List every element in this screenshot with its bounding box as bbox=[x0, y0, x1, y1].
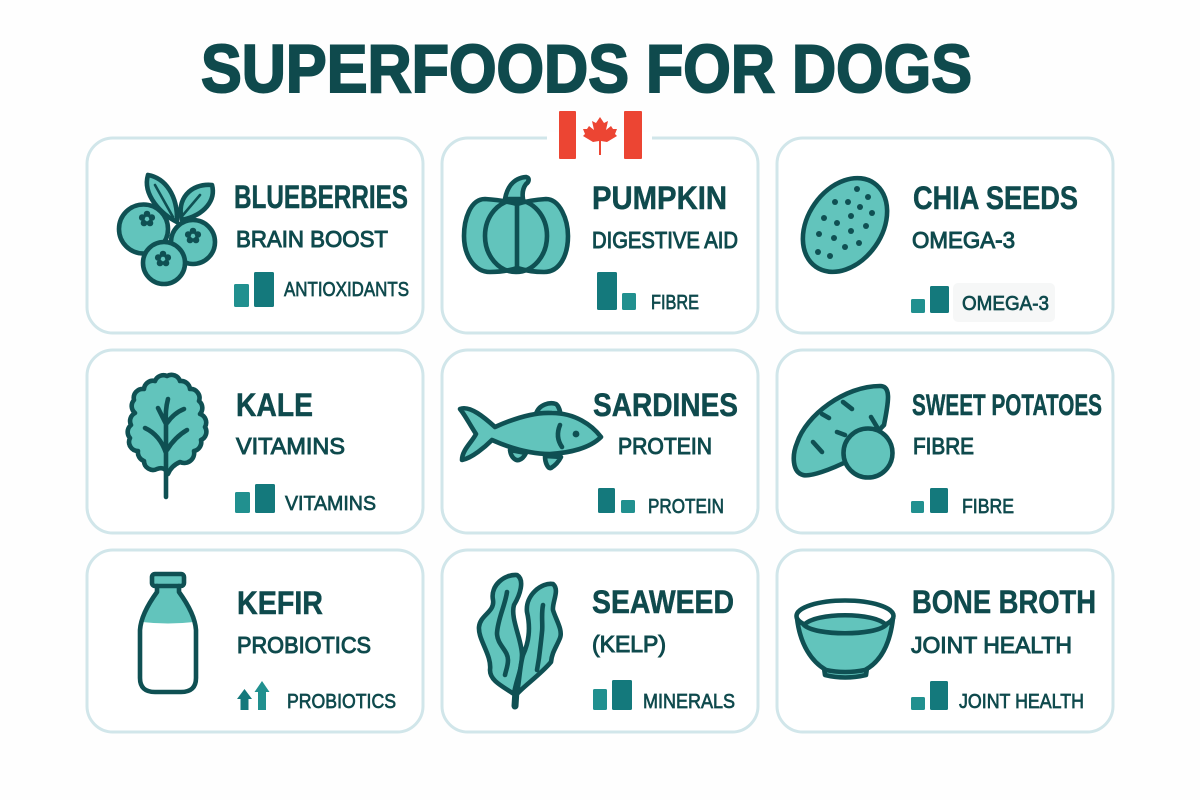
panel: blueberries bbox=[87, 138, 423, 333]
bar icon bbox=[911, 488, 948, 513]
nutrient label: ANTIOXIDANTS bbox=[284, 278, 409, 301]
food name: BLUEBERRIES bbox=[234, 179, 408, 215]
label chip bbox=[953, 283, 1055, 322]
food name: SEAWEED bbox=[592, 584, 734, 620]
bar icon bbox=[911, 681, 948, 710]
nutrient label: PROTEIN bbox=[648, 495, 724, 518]
food name: KEFIR bbox=[237, 585, 323, 621]
icon: fish bbox=[460, 403, 601, 468]
panel: pumpkin bbox=[442, 138, 758, 333]
food name: BONE BROTH bbox=[912, 584, 1096, 620]
food name: SARDINES bbox=[593, 387, 738, 423]
icon: sweet potato bbox=[794, 386, 892, 478]
nutrient label: OMEGA-3 bbox=[962, 292, 1049, 315]
nutrient label: PROBIOTICS bbox=[287, 690, 396, 713]
title: SUPERFOODS FOR DOGS bbox=[201, 31, 972, 107]
panel: chia seeds bbox=[777, 138, 1113, 333]
benefit: FIBRE bbox=[913, 433, 974, 459]
benefit: BRAIN BOOST bbox=[236, 226, 388, 252]
panel: seaweed bbox=[442, 550, 758, 732]
panel: bone broth bbox=[777, 550, 1113, 732]
benefit: JOINT HEALTH bbox=[911, 632, 1072, 658]
icon: chia seed bbox=[785, 162, 905, 288]
nutrient label: JOINT HEALTH bbox=[959, 690, 1084, 713]
nutrient label: FIBRE bbox=[962, 495, 1014, 518]
bar icon bbox=[911, 286, 949, 313]
panel: sweet potatoes bbox=[777, 350, 1113, 533]
bar icon bbox=[234, 272, 274, 307]
icon: bottle bbox=[140, 574, 196, 693]
food name: PUMPKIN bbox=[592, 180, 727, 216]
nutrient label: MINERALS bbox=[643, 690, 735, 713]
benefit: PROBIOTICS bbox=[237, 632, 371, 658]
benefit: VITAMINS bbox=[236, 433, 345, 459]
benefit: (KELP) bbox=[592, 631, 666, 657]
icon: Canadian flag bbox=[547, 111, 652, 159]
bar icon bbox=[598, 488, 635, 513]
icon: kale leaf bbox=[128, 375, 206, 497]
panel: kale bbox=[87, 350, 423, 533]
bar icon bbox=[235, 484, 275, 513]
benefit: DIGESTIVE AID bbox=[592, 227, 738, 253]
icon: seaweed bbox=[479, 575, 561, 706]
arrow icons bbox=[237, 681, 270, 710]
nutrient label: FIBRE bbox=[651, 291, 699, 314]
benefit: OMEGA-3 bbox=[912, 227, 1015, 253]
bar icon bbox=[597, 272, 636, 310]
food name: SWEET POTATOES bbox=[912, 389, 1102, 422]
food name: KALE bbox=[236, 387, 313, 423]
icon: pumpkin bbox=[464, 177, 568, 272]
panel: sardines bbox=[442, 350, 758, 533]
icon: bowl bbox=[796, 600, 894, 678]
icon: blueberries bbox=[119, 175, 215, 284]
nutrient label: VITAMINS bbox=[285, 492, 376, 515]
food name: CHIA SEEDS bbox=[913, 180, 1078, 216]
benefit: PROTEIN bbox=[618, 433, 712, 459]
panel: kefir bbox=[87, 550, 423, 732]
bar icon bbox=[593, 680, 632, 710]
